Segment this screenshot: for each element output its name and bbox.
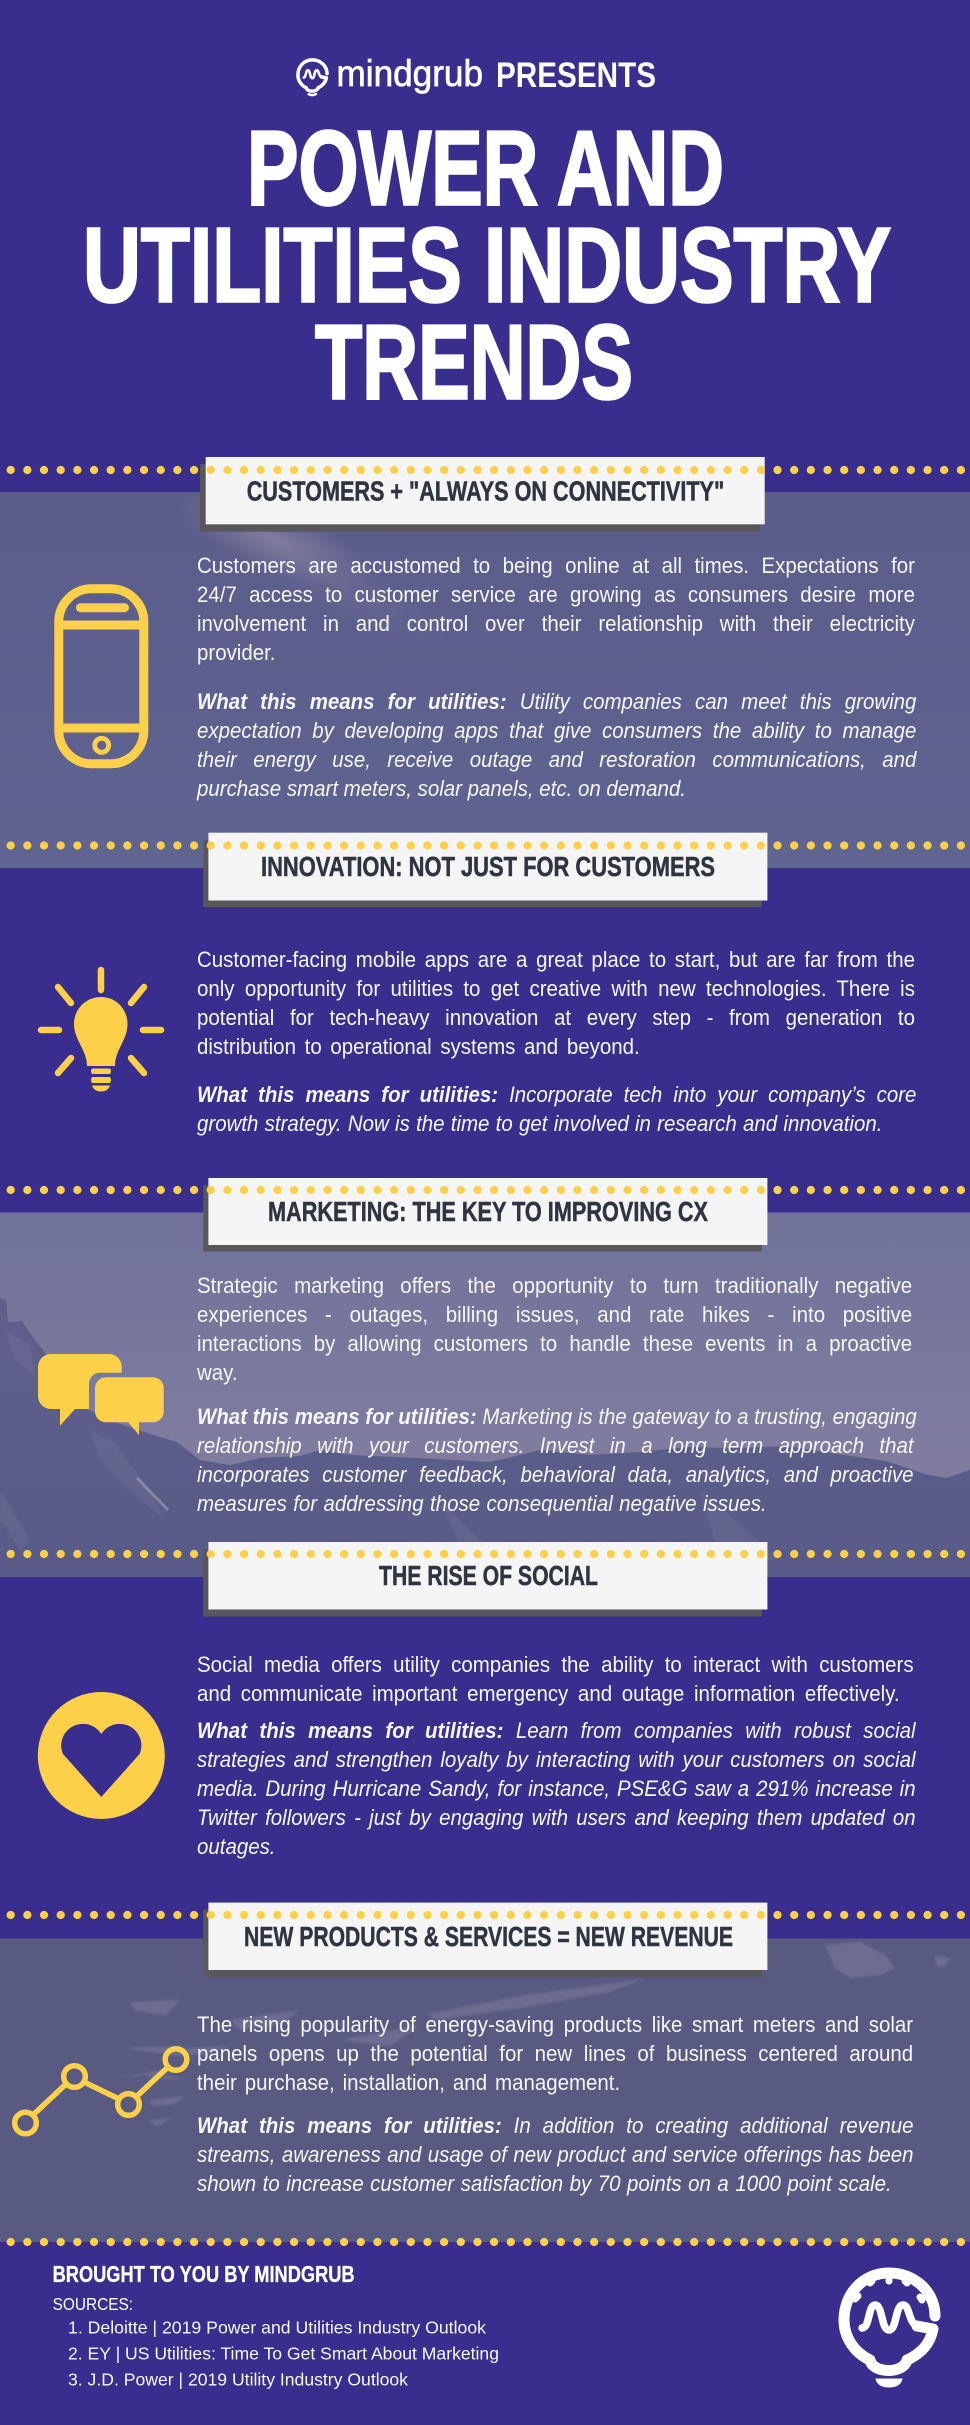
title	[83, 110, 891, 422]
text: marketing intro: Strategic marketing offers the opportunity to turn traditionally negative	[197, 1272, 913, 1298]
text: innovation intro: potential for tech-heavy innovation at every step - from generation to	[197, 1005, 915, 1030]
heading: customers: CUSTOMERS + "ALWAYS ON CONNECTIVITY"	[247, 476, 724, 507]
heading: new products	[203, 1903, 767, 1977]
band: marketing mountain background	[0, 1212, 970, 1577]
text: customers intro: 24/7 access to customer service are growing as consumers desire more	[197, 582, 915, 607]
sources list: 2. EY | US Utilities: Time To Get Smart About Marketing	[68, 2344, 499, 2364]
text: customers implications: What this means for utilities: Utility companies can meet this growing	[197, 689, 917, 714]
text: social implications: media. During Hurricane Sandy, for instance, PSE&G saw a 291% increase in	[197, 1776, 916, 1801]
footer heading: BROUGHT TO YOU BY MINDGRUB	[53, 2261, 355, 2287]
brand line: mindgrub presents	[298, 53, 656, 95]
heading: marketing	[203, 1178, 767, 1252]
icon: line chart	[15, 2049, 187, 2134]
text: customers implications: their energy use, receive outage and restoration communications, and	[197, 747, 917, 772]
text: customers intro: provider.	[197, 640, 276, 665]
text: marketing intro: interactions by allowing customers to handle these events in a proactive	[197, 1330, 913, 1356]
text: new products intro: panels opens up the potential for new lines of business centered around	[197, 2041, 913, 2066]
sources list: 3. J.D. Power | 2019 Utility Industry Outlook	[68, 2370, 408, 2390]
logo: mindgrub bulb small	[298, 60, 327, 95]
heading: innovation: INNOVATION: NOT JUST FOR CUSTOMERS	[261, 851, 715, 882]
text: innovation intro: distribution to operational systems and beyond.	[197, 1034, 640, 1059]
heading: new products: NEW PRODUCTS & SERVICES = NEW REVENUE	[244, 1921, 733, 1952]
wordmark: mindgrub	[336, 53, 483, 94]
text: social intro: and communicate important emergency and outage information effectively.	[197, 1680, 900, 1706]
logo: mindgrub bulb large	[844, 2273, 935, 2387]
icon: smartphone	[59, 589, 144, 764]
text: new products intro: The rising popularity of energy-saving products like smart meters and solar	[197, 2012, 913, 2037]
icon: chat bubbles	[38, 1354, 164, 1435]
sources list	[68, 2318, 499, 2390]
text: marketing intro: way.	[197, 1360, 238, 1384]
icon: light bulb	[41, 970, 161, 1092]
heading: marketing: MARKETING: THE KEY TO IMPROVING CX	[268, 1196, 708, 1227]
heading: innovation	[203, 833, 767, 907]
text: marketing implications: What this means for utilities: Marketing is the gateway to a trusting, engaging	[197, 1404, 917, 1429]
title: POWER AND	[247, 110, 724, 228]
text: new products implications	[197, 2113, 914, 2196]
text: marketing implications: incorporates customer feedback, behavioral data, analytics, and proactive	[197, 1462, 914, 1487]
text: innovation intro: Customer-facing mobile apps are a great place to start, but are far from the	[197, 947, 915, 972]
text: innovation implications	[197, 1082, 917, 1136]
text: new products intro	[197, 2012, 913, 2095]
heading: customers	[200, 457, 765, 532]
sources list: 1. Deloitte | 2019 Power and Utilities Industry Outlook	[68, 2318, 486, 2338]
text: social implications: strategies and strengthen loyalty by interacting with your customers on social	[197, 1747, 916, 1772]
sources label: SOURCES:	[53, 2294, 133, 2314]
text: new products implications: shown to increase customer satisfaction by 70 points on a 1000 point scale.	[197, 2171, 892, 2196]
presents label: PRESENTS	[496, 56, 656, 95]
text: new products implications: What this means for utilities: In addition to creating additional revenue	[197, 2113, 914, 2138]
text: customers intro: involvement in and control over their relationship with their electricity	[197, 611, 915, 636]
text: marketing implications: measures for addressing those consequential negative issues.	[197, 1491, 767, 1516]
text: customers implications: purchase smart meters, solar panels, etc. on demand.	[197, 776, 686, 801]
text: innovation implications: What this means for utilities: Incorporate tech into your company’s core	[197, 1082, 917, 1107]
text: innovation intro: only opportunity for utilities to get creative with new technologies. There is	[197, 976, 915, 1001]
text: customers intro: Customers are accustomed to being online at all times. Expectations for	[197, 553, 915, 578]
text: social implications	[197, 1718, 916, 1859]
text: social intro: Social media offers utility companies the ability to interact with customers	[197, 1652, 914, 1676]
text: customers intro	[197, 553, 915, 665]
heading: social	[203, 1542, 767, 1616]
band: customers photo background	[0, 471, 970, 868]
band: new products texture background	[0, 1938, 970, 2242]
text: social implications: What this means for utilities: Learn from companies with robust social	[197, 1718, 916, 1743]
text: new products intro: their purchase, installation, and management.	[197, 2070, 621, 2095]
footer credits	[53, 2261, 499, 2390]
text: customers implications	[196, 689, 917, 801]
text: social implications: outages.	[197, 1834, 276, 1859]
heading: social: THE RISE OF SOCIAL	[379, 1560, 598, 1591]
text: customers implications: expectation by developing apps that give consumers the ability to manage	[197, 718, 917, 743]
icon: heart in circle	[38, 1692, 165, 1819]
text: social intro	[197, 1652, 914, 1706]
title: TRENDS	[315, 304, 633, 422]
text: social implications: Twitter followers - just by engaging with users and keeping them updated on	[197, 1805, 916, 1830]
text: innovation implications: growth strategy. Now is the time to get involved in research and innovation.	[197, 1111, 883, 1136]
text: innovation intro	[197, 947, 915, 1059]
text: marketing implications: relationship with your customers. Invest in a long term approach that	[197, 1433, 914, 1458]
text: marketing implications	[197, 1404, 917, 1516]
text: marketing intro: experiences - outages, billing issues, and rate hikes - into positive	[197, 1302, 913, 1326]
text: marketing intro	[197, 1272, 913, 1384]
text: new products implications: streams, awareness and usage of new product and service offerings has been	[197, 2142, 914, 2167]
